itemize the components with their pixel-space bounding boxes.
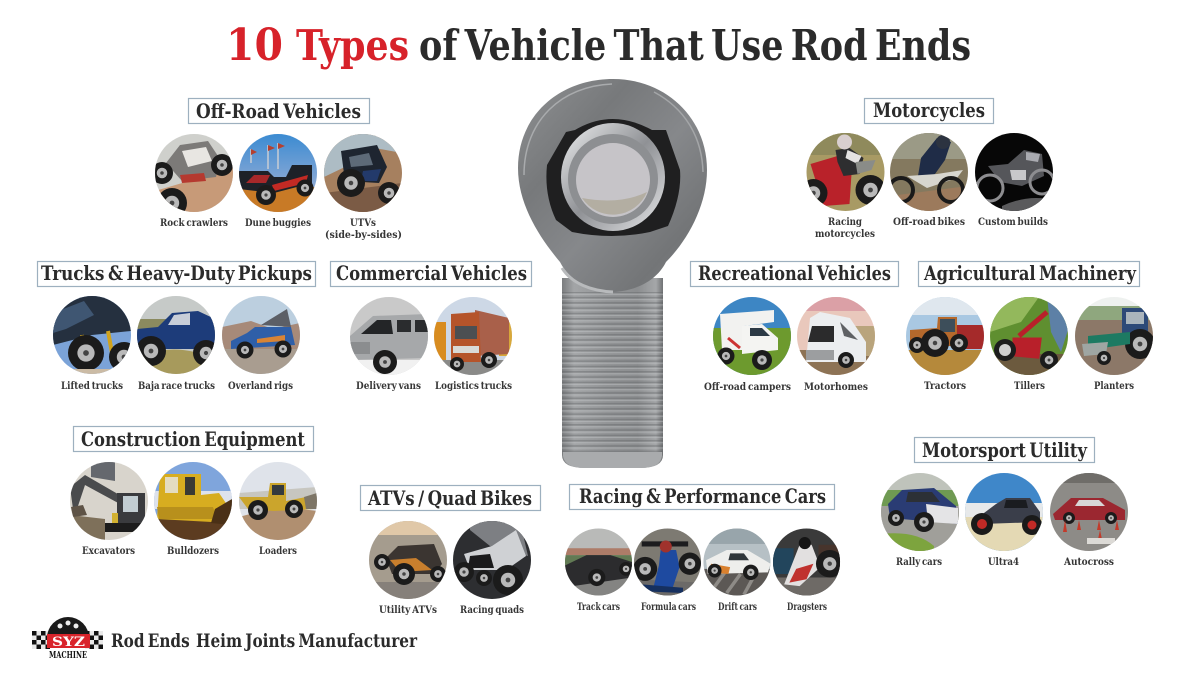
label: motorcycles [815, 228, 875, 240]
label: Excavators [82, 545, 135, 557]
label: Ultra4 [988, 556, 1019, 568]
label: Delivery vans [356, 380, 421, 392]
heading: Construction Equipment [81, 428, 305, 451]
icon: planter [1075, 297, 1155, 375]
panel: ATVs and quad bikes [360, 486, 540, 616]
label: Off-road bikes [893, 216, 965, 228]
label: Loaders [259, 545, 297, 557]
label: Dragsters [787, 601, 827, 613]
heading: Agricultural Machinery [923, 262, 1137, 285]
panel: off-road vehicles [151, 98, 402, 241]
label: Custom builds [978, 216, 1048, 228]
icon: motorhome [797, 297, 875, 375]
label: UTVs [350, 217, 376, 229]
panel: construction equipment [70, 426, 317, 557]
panel: racing and performance cars [565, 484, 843, 613]
label: Baja race trucks [138, 380, 215, 392]
panel: agricultural machinery [906, 262, 1155, 392]
heading: Trucks & Heavy-Duty Pickups [41, 262, 312, 285]
label: Tillers [1014, 380, 1045, 392]
spherical head [518, 79, 707, 292]
panel: trucks and heavy-duty pickups [38, 262, 316, 392]
icon: excavator [70, 462, 148, 540]
panel: commercial vehicles [330, 262, 532, 392]
tagline: Rod Ends Heim Joints Manufacturer [111, 631, 417, 652]
label: Racing [828, 216, 863, 228]
icon: utility ATV [369, 521, 447, 599]
panel: motorcycles [800, 98, 1054, 240]
icon: tractor [906, 297, 984, 375]
title: 10 [226, 20, 283, 71]
label: Logistics trucks [435, 380, 512, 392]
icon: racing motorcycle [800, 133, 886, 211]
label: Motorhomes [804, 381, 868, 393]
label: Drift cars [718, 601, 757, 613]
label: Off-road campers [704, 381, 791, 393]
icon: delivery van [350, 297, 428, 375]
label: Tractors [924, 380, 966, 392]
label: Lifted trucks [61, 380, 123, 392]
heading: Commercial Vehicles [336, 262, 527, 285]
title: of Vehicle That Use Rod Ends [419, 21, 971, 70]
icon: bulldozer [154, 462, 232, 540]
label: Overland rigs [228, 380, 293, 392]
label [325, 217, 402, 241]
label: Rock crawlers [160, 217, 228, 229]
icon: overland rig [222, 296, 300, 374]
icon: rally car [881, 473, 959, 551]
icon: loader [239, 462, 317, 540]
rod end photo [518, 79, 707, 468]
heading: ATVs / Quad Bikes [367, 487, 532, 510]
icon: Ultra4 [965, 473, 1043, 551]
icon: SYZ Machine logo [32, 617, 103, 661]
threaded shank [562, 278, 663, 468]
icon: track car [565, 528, 633, 596]
icon: formula car [633, 528, 701, 596]
icon: UTV [324, 134, 402, 212]
label: (side-by-sides) [325, 229, 402, 241]
icon: dune buggy [239, 134, 317, 212]
icon: rock crawler [155, 134, 233, 212]
panel: recreational vehicles [690, 262, 898, 393]
icon: baja race truck [136, 296, 219, 374]
panel: motorsport utility [881, 438, 1128, 568]
icon: lifted truck [53, 296, 139, 374]
heading: Racing & Performance Cars [579, 485, 826, 508]
label: Track cars [577, 601, 620, 613]
icon: custom build motorcycle [975, 133, 1054, 211]
label: Dune buggies [245, 217, 311, 229]
icon: dragster [773, 528, 843, 596]
icon: tiller [990, 297, 1068, 375]
icon: logistics truck [434, 297, 512, 375]
footer brand [32, 617, 417, 661]
label [815, 216, 875, 240]
label: Rally cars [896, 556, 942, 568]
heading: Off-Road Vehicles [196, 100, 361, 123]
icon: off-road camper [713, 297, 791, 375]
heading: Motorcycles [873, 99, 985, 122]
label: Racing quads [460, 604, 524, 616]
heading: Motorsport Utility [922, 439, 1088, 462]
bearing race and ball [546, 119, 680, 236]
icon: autocross [1050, 473, 1128, 551]
label: Autocross [1063, 556, 1114, 568]
label: Formula cars [641, 601, 696, 613]
title: Types [296, 21, 409, 70]
icon: SYZ Machine logo: SYZ [52, 635, 86, 650]
title [226, 20, 971, 71]
icon: racing quad [453, 521, 531, 599]
icon: drift car [703, 528, 771, 596]
icon: off-road bike [889, 133, 968, 211]
label: Bulldozers [167, 545, 219, 557]
label: Utility ATVs [379, 604, 437, 616]
label: Planters [1094, 380, 1134, 392]
heading: Recreational Vehicles [698, 262, 891, 285]
icon: SYZ Machine logo: MACHINE [49, 650, 87, 661]
